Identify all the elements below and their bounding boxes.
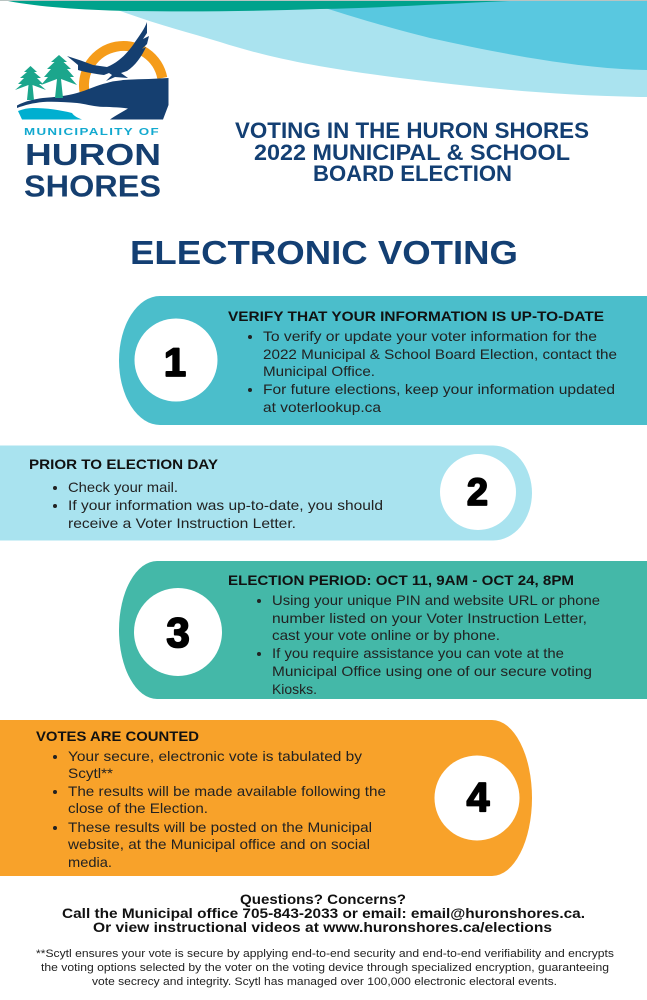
number badge 3 bbox=[134, 588, 222, 676]
panel background bbox=[119, 296, 647, 425]
logo text: Shores: SHORES bbox=[24, 168, 161, 204]
number badge 3: 3 bbox=[166, 609, 190, 656]
number badge 4: 4 bbox=[467, 774, 490, 820]
step 4 bullets: The results will be made available following the bbox=[68, 784, 386, 799]
panel: step 3 bbox=[119, 561, 647, 699]
step 3 bullets: cast your vote online or by phone. bbox=[272, 628, 500, 643]
icon: eagle bbox=[67, 22, 149, 81]
step 3 heading: ELECTION PERIOD: OCT 11, 9AM - OCT 24, 8PM bbox=[228, 572, 574, 588]
title bbox=[235, 118, 589, 186]
top wave banner bbox=[0, 0, 647, 97]
footnote: vote secrecy and integrity. Scytl has managed over 100,000 electronic electoral events. bbox=[92, 976, 557, 988]
step 3 bullets: Using your unique PIN and website URL or phone bbox=[272, 593, 600, 608]
number badge 2: 2 bbox=[467, 472, 488, 514]
panel: step 2 bbox=[0, 446, 532, 540]
footnote bbox=[36, 948, 614, 988]
icon: navy shoreline bbox=[17, 78, 168, 120]
step 4 bullets: website, at the Municipal office and on social bbox=[67, 837, 370, 852]
footnote: the voting options selected by the voter on the voting device through specialized encryption, guaranteeing bbox=[41, 962, 609, 974]
contact information: Call the Municipal office 705-843-2033 or email: email@huronshores.ca. bbox=[62, 905, 585, 921]
number badge 4 bbox=[434, 756, 520, 840]
icon: orange sun ring bbox=[84, 46, 162, 93]
step 1 bullets: To verify or update your voter information for the bbox=[263, 329, 597, 344]
step 1 bullets bbox=[248, 329, 617, 415]
number badge 2 bbox=[440, 454, 516, 530]
panel background bbox=[0, 720, 532, 876]
title: VOTING IN THE HURON SHORES bbox=[235, 118, 589, 143]
step 3 bullets: number listed on your Voter Instruction Letter, bbox=[272, 611, 587, 626]
step 4 bullets: close of the Election. bbox=[68, 801, 208, 816]
step 1 bullets: For future elections, keep your information updated bbox=[263, 382, 615, 397]
heading: electronic voting: ELECTRONIC VOTING bbox=[130, 235, 518, 272]
step 3 bullets bbox=[257, 593, 600, 697]
contact information: Or view instructional videos at www.huronshores.ca/elections bbox=[93, 919, 552, 935]
step 2 bullets: If your information was up-to-date, you should bbox=[68, 498, 383, 513]
footnote: **Scytl ensures your vote is secure by applying end-to-end security and end-to-end verifiability and encrypts bbox=[36, 948, 614, 960]
step 1 bullets: 2022 Municipal & School Board Election, contact the bbox=[263, 347, 617, 362]
icon: cyan water bbox=[18, 108, 82, 120]
title: BOARD ELECTION bbox=[313, 161, 512, 186]
step 1 bullets: Municipal Office. bbox=[263, 364, 375, 379]
icon: small pine tree bbox=[15, 66, 46, 100]
step 1 bullets: at voterlookup.ca bbox=[263, 400, 381, 415]
step 3 bullets: Municipal Office using one of our secure voting bbox=[272, 664, 592, 679]
number badge 1 bbox=[134, 318, 218, 402]
panel background bbox=[119, 561, 647, 699]
contact information bbox=[62, 891, 585, 935]
step 4 bullets bbox=[53, 749, 386, 870]
panel: step 1 bbox=[119, 296, 647, 425]
title: 2022 MUNICIPAL & SCHOOL bbox=[254, 140, 570, 165]
step 2 bullets: Check your mail. bbox=[68, 480, 178, 495]
step 2 bullets bbox=[53, 480, 383, 531]
step 3 bullets: If you require assistance you can vote at the bbox=[272, 646, 564, 661]
step 2 bullets: receive a Voter Instruction Letter. bbox=[68, 516, 296, 531]
panel background bbox=[0, 446, 532, 540]
contact information: Questions? Concerns? bbox=[240, 891, 406, 907]
step 4 bullets: Scytl** bbox=[68, 766, 114, 781]
step 4 bullets: These results will be posted on the Municipal bbox=[68, 820, 372, 835]
step 2 heading: PRIOR TO ELECTION DAY bbox=[29, 456, 219, 472]
step 1 heading: VERIFY THAT YOUR INFORMATION IS UP-TO-DATE bbox=[228, 308, 604, 324]
logo: Municipality of Huron Shores bbox=[15, 22, 168, 204]
number badge 1: 1 bbox=[164, 341, 186, 385]
step 3 bullets: Kiosks. bbox=[272, 682, 317, 697]
logo text: Municipality of: MUNICIPALITY OF bbox=[24, 127, 160, 138]
step 4 heading: VOTES ARE COUNTED bbox=[36, 728, 199, 744]
logo text: Huron: HURON bbox=[25, 137, 161, 172]
step 4 bullets: media. bbox=[68, 855, 112, 870]
step 4 bullets: Your secure, electronic vote is tabulated by bbox=[68, 749, 362, 764]
icon: large pine tree bbox=[41, 55, 77, 98]
panel: step 4 bbox=[0, 720, 532, 876]
